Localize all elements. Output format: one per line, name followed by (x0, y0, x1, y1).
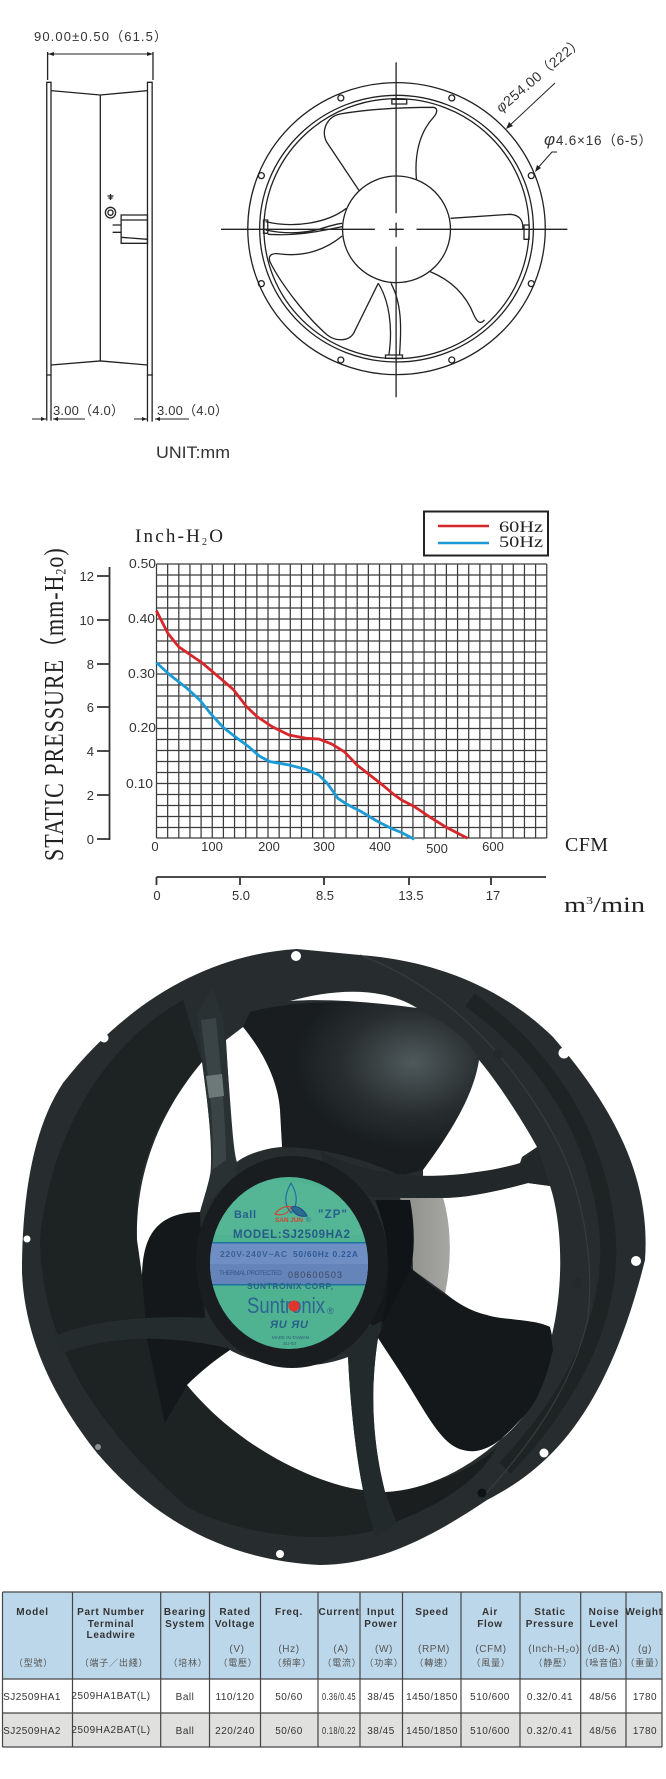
CFM axis labels: 0 (151, 839, 159, 854)
left axis mm-H2O: 10 (80, 613, 94, 628)
inch scale labels: 0.20 (129, 720, 156, 735)
panel: side view drawing (32, 29, 228, 422)
bottom strut (340, 1320, 397, 1537)
legend: 60Hz (499, 519, 543, 536)
m3/min axis (153, 877, 546, 903)
silhouette (22, 949, 646, 1565)
row: SJ2509HA2: 510/600 (470, 1726, 510, 1737)
hub sticker: SU-02 (283, 1341, 296, 1346)
CFM axis labels: 500 (426, 841, 448, 856)
header: model: Model (16, 1607, 49, 1618)
row: SJ2509HA1: 0.36/0.45 (322, 1692, 356, 1703)
row: SJ2509HA1 (3, 1691, 657, 1703)
y axis title: 2 (52, 568, 69, 575)
CFM axis labels: 200 (258, 839, 280, 854)
hub sticker: MODEL:SJ2509HA2 (233, 1229, 350, 1241)
header: static pressure (526, 1607, 580, 1668)
header: current: (A) (333, 1644, 349, 1655)
row: SJ2509HA2: 0.18/0.22 (322, 1726, 356, 1737)
row: SJ2509HA1: 110/120 (216, 1692, 254, 1703)
legend: 50Hz (499, 534, 543, 551)
inch scale labels: 0.10 (126, 776, 153, 791)
CFM axis labels (151, 839, 504, 856)
legend (424, 512, 548, 556)
hub sticker: THERMAL PROTECTED (219, 1270, 282, 1277)
hub sticker (210, 1177, 368, 1349)
hub sticker: "ZP" (318, 1209, 347, 1221)
dimension: width: 90.00±0.50（61.5） (34, 29, 167, 44)
inner shroud (40, 1000, 377, 1537)
hub sticker: ® (306, 1216, 311, 1224)
header: speed: Speed (415, 1607, 449, 1618)
left axis mm-H2O: 8 (87, 657, 94, 672)
header: part number (77, 1607, 148, 1668)
left axis mm-H2O: 6 (87, 700, 94, 715)
inch scale labels: 0.30 (128, 666, 155, 681)
hub rim (196, 1156, 388, 1368)
curve: 60Hz (156, 611, 467, 838)
header: weight (625, 1607, 665, 1668)
chart grid (156, 564, 547, 838)
row: SJ2509HA2: 220/240 (215, 1726, 255, 1737)
header: current (318, 1607, 362, 1668)
header: frequency: （頻率） (272, 1657, 312, 1668)
dimension: mounting holes (535, 130, 652, 172)
row: SJ2509HA1: 38/45 (367, 1692, 395, 1703)
lower shroud shadow band (385, 1447, 497, 1522)
hub sticker: 50/60Hz 0.22A (293, 1249, 358, 1259)
unit label: inches of water: O (209, 526, 223, 547)
y axis title: STATIC PRESSURE（mm-H (40, 575, 70, 861)
header: bearing: Bearing (164, 1607, 206, 1618)
y axis title: ) (40, 547, 70, 556)
front flange seam (360, 955, 590, 1497)
panel: fan photo (22, 949, 646, 1565)
header: weight: (g) (638, 1644, 652, 1655)
curve: 50Hz (156, 663, 414, 839)
left axis mm-H2O: 0 (87, 832, 94, 847)
m3/min unit: 3 (586, 895, 594, 907)
header: part number: Terminal (88, 1619, 134, 1630)
row: SJ2509HA1: Ball (176, 1692, 194, 1703)
sticker logo (275, 1183, 307, 1216)
hub sticker: ЯU ЯU (269, 1319, 309, 1331)
row: SJ2509HA2: 38/45 (367, 1726, 395, 1737)
m3/min axis: 13.5 (398, 888, 424, 903)
dimension: outer diameter: φ254.00（222） (493, 34, 586, 115)
hub sticker: 080600503 (288, 1270, 342, 1280)
panel: performance chart (39, 512, 645, 917)
mounting holes (24, 951, 641, 1558)
upper left strut (197, 988, 237, 1207)
dimension: width (34, 29, 167, 56)
header: part number: （端子／出綫） (80, 1657, 148, 1668)
right blade (360, 1240, 553, 1451)
header: bearing: System (165, 1619, 205, 1630)
right strut (320, 1148, 550, 1198)
header: input power: (W) (375, 1644, 393, 1655)
header: voltage: （電壓） (218, 1658, 258, 1668)
header: air flow: Air (482, 1607, 498, 1618)
panel: front view drawing (221, 34, 652, 397)
row: SJ2509HA1: 1450/1850 (406, 1692, 458, 1703)
row: SJ2509HA2: SJ2509HA2 (3, 1726, 61, 1737)
header: input power: Input (367, 1607, 395, 1618)
row: SJ2509HA1: 0.32/0.41 (527, 1692, 573, 1703)
dimension: flange thickness right: 3.00（4.0） (157, 403, 228, 418)
rear flange groove (470, 1000, 608, 1468)
row: SJ2509HA1: 48/56 (589, 1692, 617, 1703)
header: weight: Weight (625, 1607, 663, 1618)
inch scale labels: 0.40 (128, 611, 155, 626)
header: current: Current (318, 1607, 360, 1618)
header: air flow: Flow (477, 1619, 503, 1630)
header: part number: Leadwire (87, 1630, 135, 1641)
header: noise: Noise (589, 1607, 619, 1618)
hub sticker: Ball (234, 1209, 256, 1221)
m3/min axis: 8.5 (316, 888, 334, 903)
header: bearing (164, 1607, 208, 1668)
m3/min axis: 17 (486, 888, 500, 903)
dimension: flange thickness left: 3.00（4.0） (53, 403, 124, 418)
row: SJ2509HA1: 50/60 (275, 1692, 303, 1703)
header: voltage: Rated (219, 1607, 251, 1618)
m3/min axis: 0 (153, 888, 161, 903)
hub sticker: ® (327, 1306, 334, 1316)
side view outline (47, 52, 153, 422)
header: frequency: (Hz) (278, 1644, 300, 1655)
header: part number: Part Number (77, 1607, 145, 1618)
m3/min unit: /min (593, 892, 645, 917)
m3/min axis: 5.0 (232, 888, 250, 903)
header: air flow: （風量） (471, 1658, 511, 1668)
air gaps (137, 992, 560, 1492)
row: SJ2509HA2: 1450/1850 (406, 1726, 458, 1737)
header: voltage: (V) (229, 1644, 245, 1655)
row: SJ2509HA1: 2509HA1BAT(L) (71, 1691, 151, 1702)
header: static pressure: （静壓） (533, 1657, 573, 1668)
row: SJ2509HA2: 50/60 (275, 1726, 303, 1737)
header: noise: Level (589, 1619, 619, 1630)
hub sticker: SUNTRONIX CORP, (247, 1281, 333, 1291)
left axis mm-H2O: 4 (87, 744, 94, 759)
header: weight: （重量） (625, 1657, 665, 1668)
left axis mm-H2O: 12 (80, 569, 94, 584)
header: model: （型號） (14, 1657, 53, 1668)
row: SJ2509HA2: 2509HA2BAT(L) (71, 1725, 151, 1736)
header: input power: Power (364, 1619, 398, 1630)
CFM axis labels: 300 (313, 839, 335, 854)
left axis mm-H2O: 2 (87, 788, 94, 803)
CFM axis labels: 400 (369, 839, 391, 854)
fan body (22, 949, 646, 1565)
panel: specification table (2, 1592, 665, 1747)
header: input power (364, 1607, 404, 1668)
CFM axis labels: 600 (482, 839, 504, 854)
socket behind hub (375, 1200, 414, 1330)
hub sticker: SAN JUN (275, 1217, 303, 1224)
header: frequency: Freq. (275, 1607, 303, 1618)
row: SJ2509HA2: 48/56 (589, 1726, 617, 1737)
dimension: mounting holes: φ4.6×16（6-5） (544, 130, 652, 149)
grey blade edge (400, 1198, 450, 1293)
upper blade (243, 1002, 479, 1176)
table grid lines (2, 1592, 662, 1747)
header: frequency (272, 1607, 312, 1668)
unit label: inches of water: 2 (202, 537, 207, 548)
table backgrounds (2, 1592, 662, 1747)
header: speed: (RPM) (418, 1644, 450, 1655)
row: SJ2509HA2: 0.32/0.41 (527, 1726, 573, 1737)
header: model (14, 1607, 53, 1668)
header: noise: (dB-A) (588, 1644, 620, 1655)
left axis mm-H2O (80, 567, 110, 847)
hub sticker: MADE IN TAIWAN (272, 1335, 309, 1340)
dimension: flange thickness left (32, 403, 124, 421)
row: SJ2509HA1: SJ2509HA1 (3, 1692, 61, 1703)
header: air flow (471, 1607, 511, 1668)
header: static pressure: Static (534, 1607, 566, 1618)
header: air flow: (CFM) (475, 1644, 507, 1655)
CFM unit: CFM (565, 834, 608, 856)
header: static pressure: Pressure (526, 1619, 574, 1630)
header: input power: （功率） (364, 1657, 404, 1668)
header: speed (414, 1607, 454, 1668)
inch scale labels: 0.50 (129, 556, 156, 571)
header: speed: （轉速） (414, 1657, 454, 1668)
header: current: （電流） (322, 1657, 362, 1668)
m3/min unit: m (564, 892, 581, 917)
header: voltage (215, 1607, 258, 1668)
front view outline (221, 62, 567, 397)
header: noise (579, 1607, 629, 1668)
unit note: UNIT:mm (156, 443, 230, 462)
y axis title: o (40, 556, 70, 568)
unit label: inches of water: Inch-H (135, 526, 200, 547)
row: SJ2509HA1: 510/600 (470, 1692, 510, 1703)
row: SJ2509HA2: Ball (176, 1726, 194, 1737)
lower left strut (53, 1317, 235, 1353)
row: SJ2509HA2 (3, 1725, 657, 1737)
header: voltage: Voltage (215, 1619, 255, 1630)
row: SJ2509HA1: 1780 (633, 1692, 657, 1703)
hub sticker: 220V-240V~AC (220, 1249, 287, 1259)
row: SJ2509HA2: 1780 (633, 1726, 657, 1737)
dimension: flange thickness right (134, 403, 228, 421)
header: noise: （噪音值） (579, 1657, 629, 1668)
inch scale labels (126, 556, 156, 791)
hub sticker: Suntronix (247, 1293, 325, 1318)
CFM axis labels: 100 (201, 839, 223, 854)
header: bearing: （培林） (168, 1657, 208, 1668)
left blade (142, 1212, 230, 1423)
header: static pressure: (Inch-H₂o) (528, 1644, 580, 1655)
worn tape on strut (201, 1018, 226, 1170)
